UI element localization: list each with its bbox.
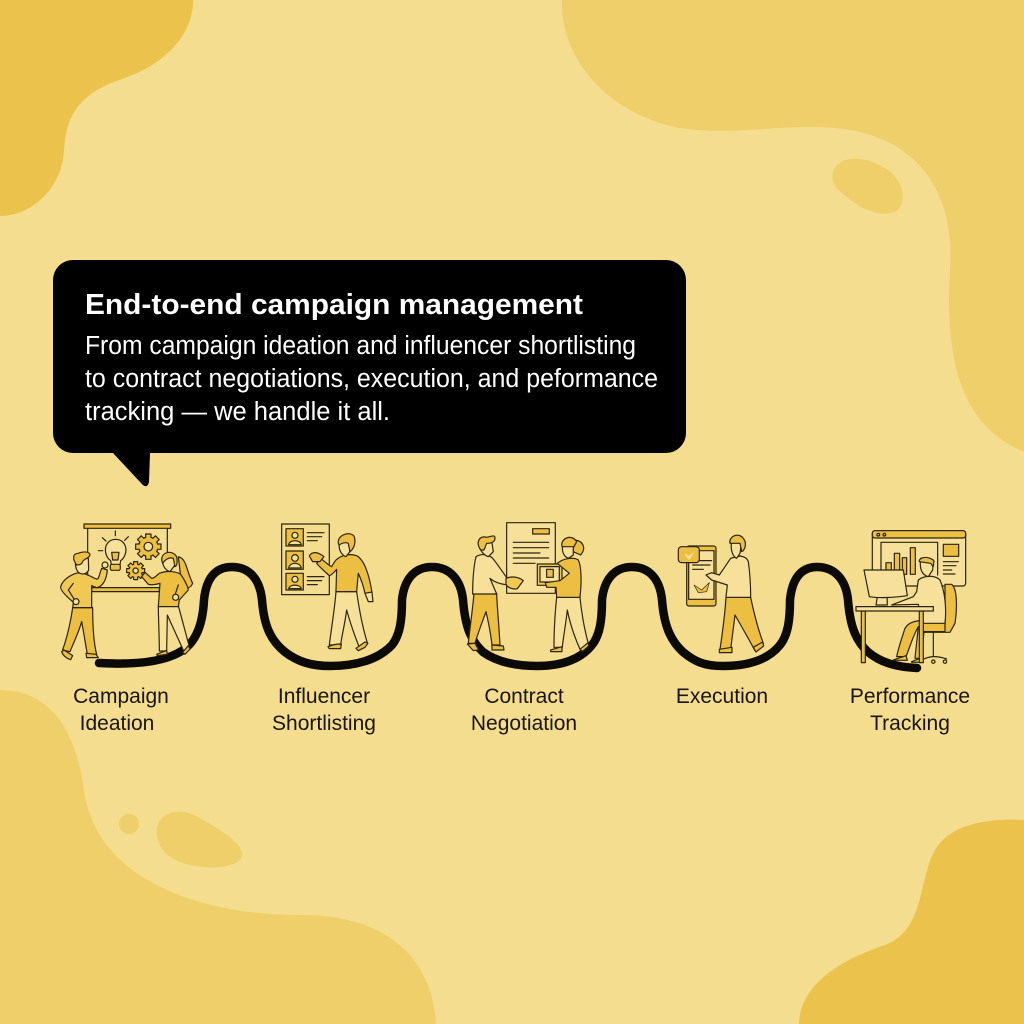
blob: small top right (832, 159, 903, 214)
blob: top right (562, 0, 1024, 452)
woman holding box (545, 537, 589, 652)
monitor (864, 570, 907, 605)
step label: influencer shortlisting: Shortlisting (272, 712, 376, 735)
blob: small circle bottom left (119, 814, 139, 834)
analytics window (872, 531, 966, 586)
phone (678, 546, 716, 606)
step label: contract negotiation: Negotiation (471, 712, 577, 735)
step label: execution: Execution (676, 685, 768, 708)
laptop box (537, 564, 562, 585)
woman (142, 552, 193, 656)
presentation board (84, 524, 171, 592)
illustration: execution (678, 535, 764, 653)
blob: top left (0, 0, 193, 216)
handshake (506, 577, 523, 589)
contract document (507, 523, 555, 593)
callout bubble (53, 260, 686, 486)
chair (922, 584, 956, 663)
step label: influencer shortlisting: Influencer (278, 685, 370, 708)
callout body: From campaign ideation and influencer shortlisting (85, 332, 636, 360)
step label: contract negotiation: Contract (484, 685, 564, 708)
step label: performance tracking: Performance (850, 685, 970, 708)
icon: gears (127, 534, 161, 580)
man (61, 552, 108, 660)
winding path line (99, 567, 917, 668)
man handshake (467, 536, 507, 651)
callout body (85, 332, 658, 426)
step label: campaign ideation: Campaign (73, 685, 169, 708)
candidate sheet (282, 524, 329, 595)
desk (856, 607, 933, 663)
illustration: campaign ideation (61, 524, 193, 660)
illustration: influencer shortlisting (282, 524, 373, 651)
callout body: tracking — we handle it all. (85, 398, 390, 426)
callout (53, 260, 686, 486)
blob: bottom right (799, 820, 1024, 1024)
step label: performance tracking: Tracking (870, 712, 950, 735)
seated person (892, 557, 946, 662)
man pointing (309, 534, 373, 651)
blob: bottom left (0, 690, 436, 1024)
icon: light bulb (98, 531, 128, 570)
callout heading: End-to-end campaign management (85, 289, 584, 321)
illustration: contract negotiation (467, 523, 589, 652)
callout body: to contract negotiations, execution, and peformance (85, 365, 658, 393)
illustration: performance tracking (856, 531, 966, 663)
man with phone (706, 535, 764, 653)
step label: campaign ideation: Ideation (80, 712, 154, 735)
blob: small bottom left (157, 812, 242, 867)
